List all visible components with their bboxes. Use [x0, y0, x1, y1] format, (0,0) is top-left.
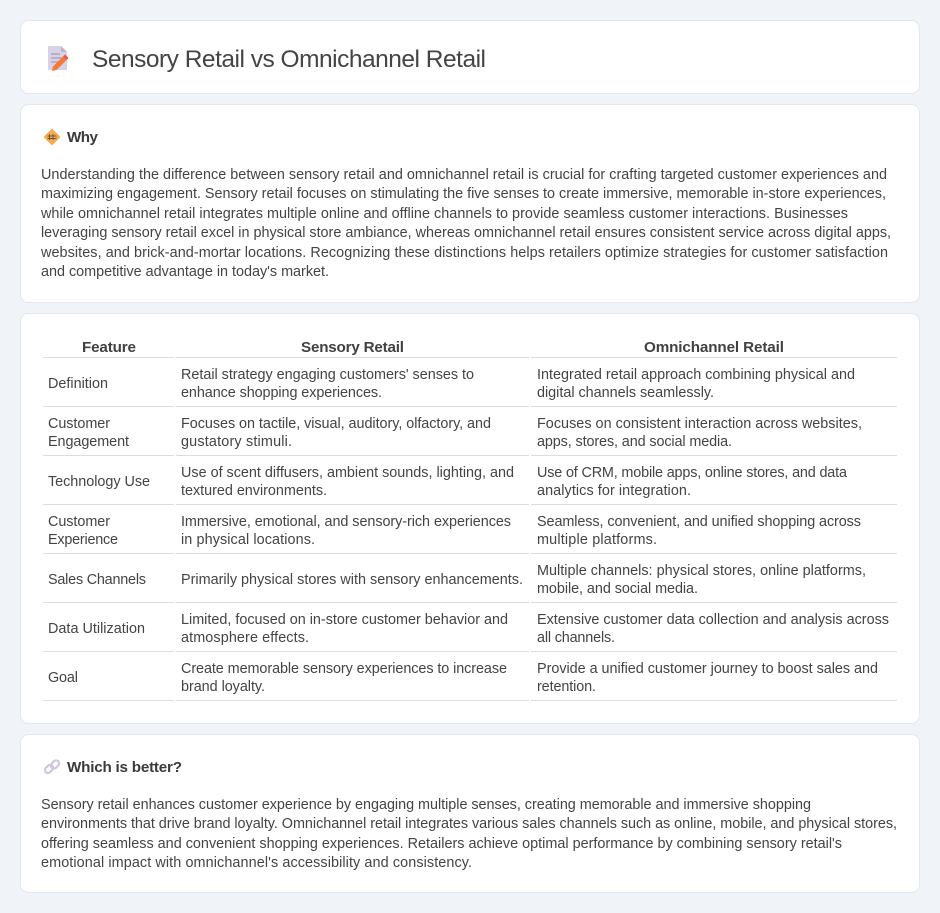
- table row: customer experience: Experience: [48, 532, 118, 548]
- table row: definition: digital channels seamlessly.: [537, 385, 714, 401]
- table row: definition: Retail strategy engaging customers' senses to: [181, 367, 474, 383]
- text block: why paragraph: while omnichannel retail integrates multiple online and offline channels to provide seamless customer interactions. Businesses: [40, 206, 848, 222]
- table row: data utilization: Extensive customer data collection and analysis across: [537, 612, 889, 628]
- text block: which is better paragraph: emotional impact with omnichannel's accessibility and consistency.: [41, 855, 472, 871]
- table row: definition: Integrated retail approach combining physical and: [537, 367, 855, 383]
- table header row: Omnichannel Retail: [644, 339, 784, 356]
- icon: warning diamond: [44, 128, 60, 146]
- table row: technology use: Use of CRM, mobile apps, online stores, and data: [537, 465, 847, 481]
- text block: why paragraph: Understanding the difference between sensory retail and omnichannel retail is crucial for crafting targeted customer experiences and: [41, 167, 887, 183]
- table row: customer experience: multiple platforms.: [537, 532, 657, 548]
- table row: definition: [43, 367, 897, 407]
- table row: goal: Goal: [48, 670, 78, 686]
- table row: sales channels: Sales Channels: [48, 572, 146, 588]
- text block: which is better paragraph: offering seamless and convenient shopping experiences. Retailers achieve optimal performance by combining sensory retail's: [41, 836, 842, 852]
- table row: technology use: textured environments.: [181, 483, 327, 499]
- text block: why paragraph: and competitive advantage in today's market.: [41, 264, 329, 280]
- table row: data utilization: all channels.: [537, 630, 615, 646]
- table row: technology use: Technology Use: [48, 474, 150, 490]
- table row: sales channels: [43, 563, 897, 603]
- table row: data utilization: Data Utilization: [48, 621, 145, 637]
- table row: customer experience: [43, 514, 897, 554]
- table row: data utilization: Limited, focused on in-store customer behavior and: [181, 612, 508, 628]
- table row: customer engagement: Focuses on tactile, visual, auditory, olfactory, and: [181, 416, 491, 432]
- text block: which is better paragraph: Sensory retail enhances customer experience by engaging multiple senses, creating memorable and immersive shopping: [41, 797, 811, 813]
- table row: sales channels: mobile, and social media.: [537, 581, 698, 597]
- icon: link: [44, 759, 60, 774]
- table row: goal: retention.: [537, 679, 596, 695]
- text block: which is better paragraph: environments that drive brand loyalty. Omnichannel retail integrates various sales channels such as online, mobile, and physical stores,: [41, 816, 897, 832]
- table row: sales channels: Primarily physical stores with sensory enhancements.: [181, 572, 523, 588]
- table row: goal: Create memorable sensory experiences to increase: [181, 661, 507, 677]
- table row: customer engagement: Focuses on consistent interaction across websites,: [537, 416, 862, 432]
- panel: comparison table: [20, 314, 920, 724]
- table row: data utilization: [43, 612, 897, 652]
- table row: customer engagement: apps, stores, and social media.: [537, 434, 732, 450]
- text block: why paragraph: websites, and brick-and-mortar locations. Recognizing these distinctions helps retailers optimize strategies for customer satisfaction: [40, 245, 888, 261]
- table row: data utilization: atmosphere effects.: [181, 630, 309, 646]
- table row: goal: brand loyalty.: [181, 679, 265, 695]
- table row: technology use: analytics for integration.: [537, 483, 691, 499]
- heading: why: Why: [67, 129, 99, 146]
- table row: technology use: [43, 465, 897, 505]
- table header row: [43, 339, 897, 358]
- table row: goal: [43, 661, 897, 701]
- title: Sensory Retail vs Omnichannel Retail: [92, 46, 486, 73]
- table row: customer experience: Immersive, emotional, and sensory-rich experiences: [181, 514, 511, 530]
- table row: customer experience: Customer: [48, 514, 110, 530]
- table row: technology use: Use of scent diffusers, ambient sounds, lighting, and: [181, 465, 514, 481]
- table row: customer experience: in physical locations.: [181, 532, 315, 548]
- table row: definition: Definition: [48, 376, 108, 392]
- icon: memo with pencil: [48, 46, 68, 71]
- text block: why paragraph: leveraging sensory retail excel in physical store ambiance, whereas omnichannel retail ensures consistent service across digital apps,: [41, 225, 891, 241]
- table row: customer engagement: Engagement: [48, 434, 129, 450]
- text block: why paragraph: [40, 167, 891, 280]
- table row: customer engagement: [43, 416, 897, 456]
- table row: definition: enhance shopping experiences.: [181, 385, 382, 401]
- table row: customer experience: Seamless, convenient, and unified shopping across: [537, 514, 861, 530]
- heading: which is better: Which is better?: [67, 759, 182, 776]
- table header row: Feature: [82, 339, 136, 356]
- table row: customer engagement: Customer: [48, 416, 110, 432]
- table header row: Sensory Retail: [301, 339, 404, 356]
- panel: why: [20, 104, 920, 302]
- table row: sales channels: Multiple channels: physical stores, online platforms,: [537, 563, 866, 579]
- text block: why paragraph: maximizing engagement. Sensory retail focuses on stimulating the five senses to create immersive, memorable in-store experiences,: [41, 186, 886, 202]
- panel: which is better: [20, 734, 920, 892]
- table row: customer engagement: gustatory stimuli.: [181, 434, 292, 450]
- text block: which is better paragraph: [41, 797, 897, 871]
- table row: goal: Provide a unified customer journey to boost sales and: [537, 661, 878, 677]
- panel: title header: [20, 20, 920, 94]
